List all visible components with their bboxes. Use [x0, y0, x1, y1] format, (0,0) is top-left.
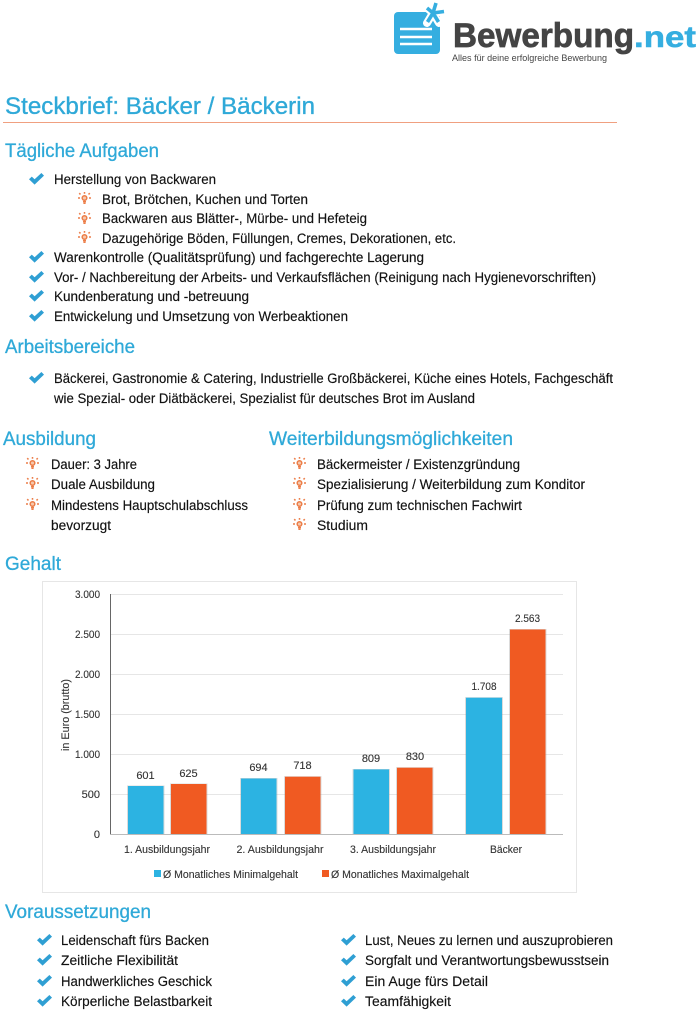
panel: Weiterbildungsmöglichkeiten: Studium: [317, 518, 368, 533]
panel: Weiterbildungsmöglichkeiten: Spezialisierung / Weiterbildung zum Konditor: [317, 477, 585, 492]
y axis labels: [75, 589, 100, 841]
panel: Ausbildung: bevorzugt: [51, 518, 111, 533]
logo wordmark: Bewerbung: [453, 17, 634, 55]
category labels: 1. Ausbildungsjahr: [124, 844, 210, 856]
y axis labels: 0: [94, 829, 100, 841]
panel: Tägliche Aufgaben: [5, 140, 596, 324]
panel: Ausbildung: [3, 428, 248, 533]
y axis labels: 2.000: [75, 669, 100, 681]
panel: Arbeitsbereiche: wie Spezial- oder Diätbäckerei, Spezialist für deutsches Brot im Ausland: [53, 391, 475, 406]
value labels: 2.563: [515, 613, 540, 625]
y axis labels: 1.500: [75, 709, 100, 721]
heading: Arbeitsbereiche: [5, 336, 135, 358]
value labels: 625: [179, 768, 198, 780]
bar chart: Gehalt: [42, 582, 576, 892]
panel: Ausbildung: Dauer: 3 Jahre: [51, 457, 137, 472]
value labels: 694: [249, 762, 268, 774]
value labels: 601: [136, 770, 155, 782]
heading: Tägliche Aufgaben: [5, 140, 159, 162]
panel: Ausbildung: Duale Ausbildung: [51, 477, 155, 492]
panel: Tägliche Aufgaben: Warenkontrolle (Qualitätsprüfung) und fachgerechte Lagerung: [54, 250, 424, 265]
y axis labels: 1.000: [75, 749, 100, 761]
y axis title: in Euro (brutto): [60, 679, 72, 751]
panel: Voraussetzungen: Körperliche Belastbarkeit: [61, 994, 212, 1009]
heading: Voraussetzungen: [5, 901, 151, 923]
panel: Weiterbildungsmöglichkeiten: [269, 428, 585, 533]
panel: Ausbildung: Mindestens Hauptschulabschluss: [51, 498, 248, 513]
logo: [394, 2, 696, 64]
value labels: [136, 613, 540, 782]
panel: Tägliche Aufgaben: Brot, Brötchen, Kuchen und Torten: [102, 192, 308, 207]
panel: Weiterbildungsmöglichkeiten: Bäckermeister / Existenzgründung: [317, 457, 520, 472]
panel: Tägliche Aufgaben: Dazugehörige Böden, Füllungen, Cremes, Dekorationen, etc.: [102, 231, 456, 246]
category labels: 2. Ausbildungsjahr: [236, 844, 324, 856]
logo domain: .net: [634, 21, 696, 54]
panel: Voraussetzungen: Teamfähigkeit: [365, 994, 451, 1009]
panel: Voraussetzungen: Lust, Neues zu lernen und auszuprobieren: [365, 933, 613, 948]
heading: Gehalt: Gehalt: [5, 553, 62, 575]
logo tagline: Alles für deine erfolgreiche Bewerbung: [452, 53, 607, 64]
legend: Ø Monatliches Maximalgehalt: [331, 869, 469, 881]
title: Steckbrief: Bäcker / Bäckerin: [5, 93, 315, 120]
y axis labels: 500: [82, 789, 100, 801]
value labels: 1.708: [472, 681, 496, 693]
value labels: 809: [362, 753, 380, 765]
panel: Arbeitsbereiche: Bäckerei, Gastronomie & Catering, Industrielle Großbäckerei, Küche eines Hotels, Fachgeschäft: [54, 371, 613, 386]
bars: [127, 629, 546, 834]
category labels: [124, 844, 522, 856]
panel: Tägliche Aufgaben: Backwaren aus Blätter-, Mürbe- und Hefeteig: [102, 211, 367, 226]
panel: Arbeitsbereiche: [5, 336, 613, 406]
panel: Tägliche Aufgaben: Kundenberatung und -betreuung: [54, 289, 249, 304]
category labels: Bäcker: [490, 844, 522, 856]
heading: Weiterbildungsmöglichkeiten: [269, 428, 513, 450]
heading: Ausbildung: [3, 428, 96, 450]
panel: Tägliche Aufgaben: Herstellung von Backwaren: [54, 172, 216, 187]
panel: Voraussetzungen: Leidenschaft fürs Backen: [61, 933, 209, 948]
y axis labels: 2.500: [75, 629, 100, 641]
panel: Voraussetzungen: Sorgfalt und Verantwortungsbewusstsein: [365, 953, 609, 968]
legend: Ø Monatliches Minimalgehalt: [163, 869, 298, 881]
value labels: 830: [406, 751, 424, 763]
legend: [154, 869, 469, 881]
panel: Tägliche Aufgaben: Vor- / Nachbereitung der Arbeits- und Verkaufsflächen (Reinigung nach Hygienevorschriften): [54, 270, 596, 285]
icon: logo document with star: [394, 2, 445, 54]
panel: Tägliche Aufgaben: Entwickelung und Umsetzung von Werbeaktionen: [54, 309, 348, 324]
panel: Voraussetzungen: Ein Auge fürs Detail: [365, 974, 488, 989]
panel: Voraussetzungen: Zeitliche Flexibilität: [61, 953, 178, 968]
value labels: 718: [293, 760, 312, 772]
category labels: 3. Ausbildungsjahr: [350, 844, 436, 856]
panel: Weiterbildungsmöglichkeiten: Prüfung zum technischen Fachwirt: [317, 498, 522, 513]
y axis labels: 3.000: [75, 589, 100, 601]
panel: Voraussetzungen: Handwerkliches Geschick: [61, 974, 212, 989]
panel: Voraussetzungen: [5, 901, 613, 1009]
